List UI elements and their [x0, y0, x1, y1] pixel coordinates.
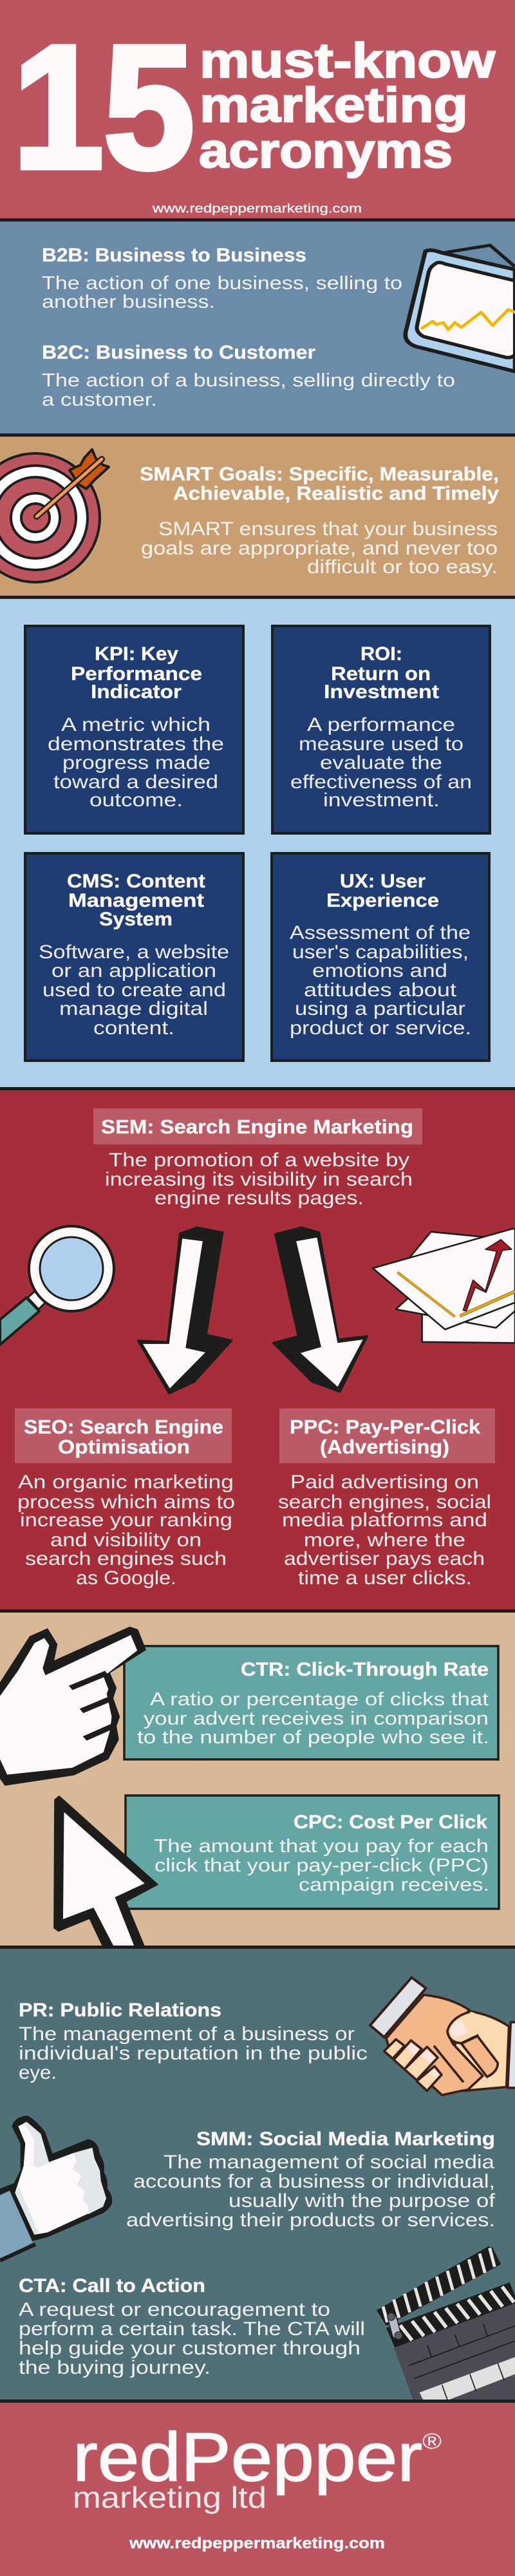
- SEO description: An organic marketing: [18, 1472, 234, 1493]
- KPI description: [48, 714, 224, 811]
- ROI heading: [324, 643, 439, 703]
- icon: magnifying glass: [0, 1226, 114, 1345]
- SMART description: SMART ensures that your business: [158, 518, 498, 540]
- icon: television chart: [406, 245, 515, 372]
- CMS description: content.: [93, 1018, 174, 1039]
- icon: thumbs up: [0, 2116, 112, 2260]
- arrow: down left to SEO: [138, 1227, 232, 1394]
- PPC description: search engines, social: [278, 1492, 491, 1513]
- ROI heading: ROI:: [360, 643, 402, 665]
- panel: B2B and B2C: [0, 222, 515, 433]
- SEO description: process which aims to: [17, 1492, 235, 1513]
- CMS heading: System: [99, 909, 173, 930]
- PR description: [19, 2023, 368, 2083]
- panel: header: [0, 0, 515, 218]
- B2C description: [42, 370, 455, 410]
- B2C description: a customer.: [42, 390, 157, 410]
- ROI description: evaluate the: [320, 752, 442, 773]
- icon: target with arrow: [0, 450, 109, 582]
- CTA heading: CTA: Call to Action: [19, 2275, 205, 2297]
- arrow: down right to PPC: [273, 1227, 367, 1392]
- CMS description: or an application: [52, 960, 216, 981]
- CTA description: perform a certain task. The CTA will: [19, 2318, 365, 2340]
- card: CTR: [124, 1646, 498, 1759]
- UX description: emotions and: [312, 960, 447, 981]
- icon: charts on paper: [373, 1229, 515, 1343]
- KPI heading: [71, 643, 202, 703]
- SMART description: difficult or too easy.: [307, 556, 498, 578]
- ROI description: measure used to: [299, 734, 464, 755]
- CMS heading: [67, 871, 205, 930]
- icon: mouse cursor: [53, 1795, 158, 1946]
- CMS heading: Management: [68, 890, 204, 911]
- B2B description: [42, 273, 402, 312]
- SEO description: and visibility on: [50, 1530, 201, 1551]
- ROI description: investment.: [323, 790, 440, 811]
- KPI description: A metric which: [61, 714, 211, 735]
- PR description: eye.: [19, 2062, 57, 2083]
- CPC heading: CPC: Cost Per Click: [294, 1812, 487, 1833]
- title: acronyms: [199, 124, 453, 178]
- CTR description: A ratio or percentage of clicks that: [150, 1689, 489, 1710]
- CTA description: [19, 2299, 365, 2378]
- ROI description: A performance: [307, 714, 455, 735]
- SEO description: as Google.: [76, 1567, 176, 1589]
- CMS heading: CMS: Content: [67, 871, 205, 892]
- SEO heading: [15, 1408, 232, 1463]
- ROI description: effectiveness of an: [290, 772, 472, 793]
- PPC description: media platforms and: [282, 1510, 487, 1531]
- SEM description: [105, 1150, 413, 1209]
- KPI description: demonstrates the: [48, 734, 224, 755]
- card: CPC: [126, 1795, 499, 1909]
- SEM heading: [93, 1108, 422, 1144]
- PPC description: time a user clicks.: [298, 1567, 472, 1589]
- logo: redPepper: ®: [422, 2429, 442, 2454]
- B2C description: The action of a business, selling directly to: [42, 370, 455, 391]
- SMM description: The management of social media: [164, 2152, 494, 2173]
- card: ROI: [272, 626, 490, 833]
- UX heading: Experience: [326, 890, 439, 911]
- title: must-know: [200, 33, 496, 88]
- icon: clapperboard: [377, 2246, 515, 2400]
- title: marketing: [200, 78, 468, 133]
- KPI heading: Performance: [71, 663, 202, 685]
- SEO heading: SEO: Search Engine: [24, 1416, 223, 1438]
- KPI description: progress made: [62, 752, 211, 773]
- B2B heading: B2B: Business to Business: [42, 245, 306, 266]
- UX description: attitudes about: [304, 980, 457, 1001]
- footer website url: www.redpeppermarketing.com: [129, 2535, 385, 2552]
- UX description: using a particular: [295, 998, 465, 1019]
- CTR description: to the number of people who see it.: [137, 1727, 489, 1748]
- PPC description: [278, 1472, 491, 1589]
- SEM heading: SEM: Search Engine Marketing: [101, 1115, 413, 1138]
- UX description: Assessment of the: [290, 922, 471, 943]
- SMART heading: [140, 464, 499, 504]
- CMS description: Software, a website: [39, 942, 229, 963]
- PPC heading: PPC: Pay-Per-Click: [290, 1416, 481, 1438]
- CMS description: [39, 942, 229, 1039]
- ROI description: [290, 714, 472, 811]
- PR description: individual's reputation in the public: [19, 2043, 368, 2064]
- PPC heading: [279, 1408, 495, 1463]
- UX description: [290, 922, 471, 1039]
- website url: www.redpeppermarketing.com: [152, 202, 362, 216]
- panel: CTR and CPC: [0, 1613, 515, 1946]
- KPI description: toward a desired: [53, 772, 218, 793]
- CTA description: help guide your customer through: [19, 2338, 360, 2359]
- PPC description: Paid advertising on: [290, 1472, 479, 1493]
- SMM description: [126, 2152, 496, 2231]
- CTR description: [137, 1689, 489, 1748]
- SMART heading: Achievable, Realistic and Timely: [173, 483, 499, 504]
- CMS description: used to create and: [42, 980, 226, 1001]
- B2C heading: B2C: Business to Customer: [42, 342, 315, 363]
- PPC heading: (Advertising): [320, 1435, 449, 1458]
- CTA description: the buying journey.: [19, 2357, 211, 2378]
- KPI description: outcome.: [89, 790, 183, 811]
- PR description: The management of a business or: [19, 2023, 355, 2045]
- icon: pointing hand: [0, 1627, 146, 1786]
- PPC description: more, where the: [304, 1530, 465, 1551]
- UX description: product or service.: [290, 1018, 471, 1039]
- SEM description: increasing its visibility in search: [105, 1169, 413, 1190]
- title: [199, 33, 496, 178]
- CTA description: A request or encouragement to: [19, 2299, 330, 2320]
- SEO description: increase your ranking: [20, 1510, 232, 1531]
- UX description: user's capabilities,: [292, 942, 469, 963]
- KPI heading: Indicator: [91, 681, 182, 703]
- ROI heading: Investment: [324, 681, 439, 703]
- UX heading: UX: User: [340, 871, 426, 892]
- icon: handshake: [370, 1978, 515, 2095]
- logo: redPepper: marketing ltd: [73, 2481, 267, 2514]
- CMS description: manage digital: [59, 998, 208, 1019]
- card: CMS: [25, 853, 243, 1061]
- logo: redPepper: redPepper: [73, 2418, 422, 2496]
- CPC description: The amount that you pay for each: [154, 1836, 489, 1857]
- SEO description: search engines such: [25, 1548, 227, 1569]
- panel: KPI ROI CMS UX: [0, 599, 515, 1087]
- SMM description: usually with the purpose of: [229, 2190, 496, 2211]
- SMM heading: SMM: Social Media Marketing: [196, 2128, 495, 2150]
- SMM description: advertising their products or services.: [126, 2210, 495, 2231]
- CTR heading: CTR: Click-Through Rate: [241, 1659, 489, 1680]
- KPI heading: KPI: Key: [95, 643, 178, 665]
- B2B description: another business.: [42, 292, 215, 312]
- SMART description: [141, 518, 498, 578]
- CTR description: your advert receives in comparison: [144, 1709, 489, 1729]
- card: KPI: [25, 626, 243, 833]
- SMART heading: SMART Goals: Specific, Measurable,: [140, 464, 499, 485]
- ROI heading: Return on: [331, 663, 431, 685]
- panel: PR SMM CTA: [0, 1949, 515, 2400]
- UX heading: [326, 871, 439, 911]
- PR heading: PR: Public Relations: [19, 2000, 221, 2021]
- SMART description: goals are appropriate, and never too: [141, 538, 498, 559]
- SEO heading: Optimisation: [58, 1435, 190, 1458]
- SEO description: [17, 1472, 235, 1589]
- SEM description: The promotion of a website by: [109, 1150, 409, 1171]
- panel: SEM SEO PPC: [0, 1090, 515, 1609]
- big number 15: 15: [13, 9, 194, 205]
- CPC description: campaign receives.: [299, 1875, 489, 1895]
- CPC description: [154, 1836, 489, 1895]
- card: UX: [272, 853, 489, 1061]
- SEM description: engine results pages.: [154, 1188, 364, 1209]
- B2B description: The action of one business, selling to: [42, 273, 402, 294]
- panel: footer: [0, 2403, 515, 2576]
- panel: SMART goals: [0, 437, 515, 596]
- SMM description: accounts for a business or individual,: [133, 2171, 495, 2192]
- PPC description: advertiser pays each: [284, 1548, 485, 1569]
- CPC description: click that your pay-per-click (PPC): [154, 1855, 489, 1876]
